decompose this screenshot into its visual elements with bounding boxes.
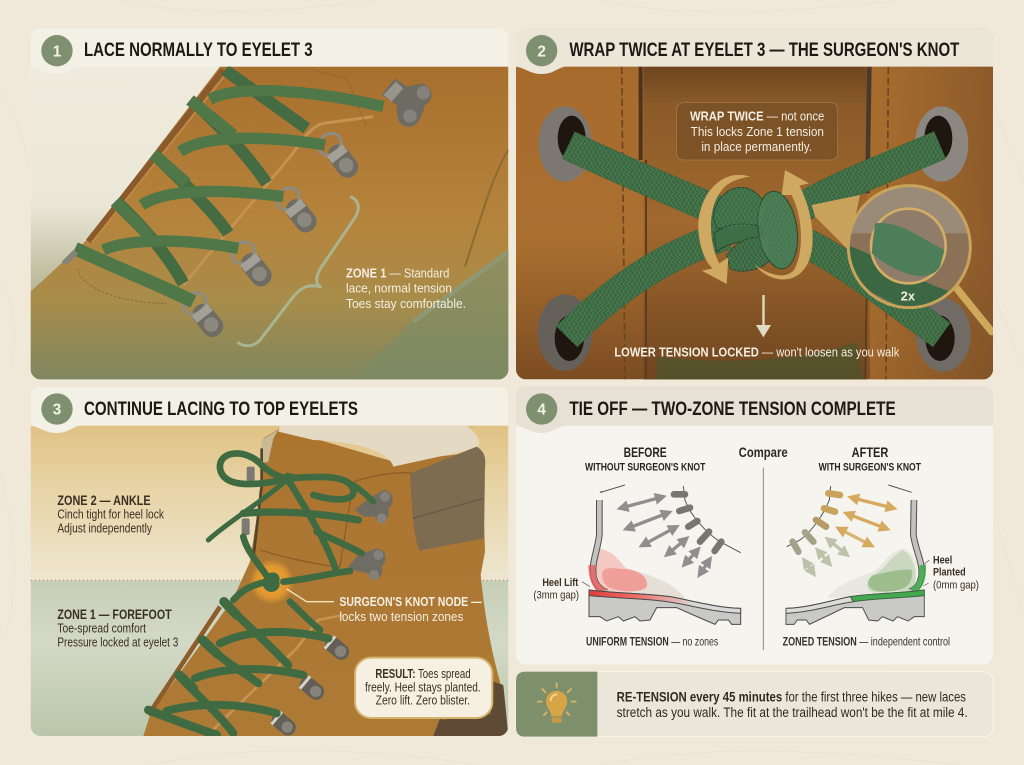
- boot leather: [31, 67, 508, 379]
- before heading: WITHOUT SURGEON'S KNOT: [585, 462, 706, 474]
- panel 1 header: [31, 28, 508, 74]
- fur collar: [278, 426, 479, 467]
- panel 3 header: 3: [53, 402, 61, 419]
- wrap twice callout: WRAP TWICE — not once: [690, 109, 824, 124]
- tip text: RE-TENSION every 45 minutes for the first three hikes — new laces: [617, 689, 966, 704]
- ankle zone background: [31, 387, 508, 581]
- hardware: [242, 467, 393, 739]
- zone 1 label: Pressure locked at eyelet 3: [57, 635, 178, 650]
- panel 1 background: [30, 209, 508, 380]
- laces: [148, 485, 373, 735]
- tip bar: [516, 672, 993, 737]
- before sole: [589, 590, 741, 624]
- leather details: [148, 448, 412, 736]
- surgeon's knot node label: SURGEON'S KNOT NODE —: [339, 594, 482, 609]
- before foot shape: [596, 548, 685, 598]
- after boot shell: [910, 500, 922, 592]
- tip text: stretch as you walk. The fit at the trailhead won't be the fit at mile 4.: [617, 705, 968, 720]
- before lace pegs: [674, 494, 721, 551]
- forefoot zone background: [31, 581, 508, 736]
- zone 1 note: [346, 265, 466, 311]
- panel 3 header: [31, 387, 508, 433]
- boot sole: [433, 682, 508, 736]
- surgeon's knot node label: locks two tension zones: [339, 609, 464, 624]
- compare label: Compare: [739, 444, 788, 460]
- surgeon's knot: [713, 187, 802, 271]
- heel lift label: Heel Lift: [542, 577, 579, 589]
- comparison divider: [762, 468, 765, 650]
- knot glow: [250, 560, 293, 603]
- eyelet hardware right: [179, 78, 432, 342]
- panel 3 header: CONTINUE LACING TO TOP EYELETS: [84, 398, 358, 420]
- surgeon's knot node label: [340, 597, 482, 621]
- wrap twice callout: in place permanently.: [701, 139, 812, 154]
- boot sole band: [353, 250, 508, 379]
- icon: light bulb: [538, 683, 576, 723]
- result callout: Zero lift. Zero blister.: [376, 692, 470, 707]
- result callout: RESULT: Toes spread: [375, 666, 471, 681]
- leather edge and stitching: [78, 70, 373, 303]
- zone 2 label: ZONE 2 — ANKLE: [57, 493, 151, 508]
- wrap twice callout: [677, 103, 838, 160]
- gold rotation arrows: [698, 170, 813, 284]
- after sole: [786, 590, 924, 624]
- lace flaps and stitching: [622, 67, 888, 379]
- after foot shape: [827, 548, 917, 598]
- zone 1 bracket: [237, 197, 358, 346]
- result callout: freely. Heel stays planted.: [365, 679, 481, 694]
- heel planted label: [923, 554, 979, 591]
- panel 2 header: [516, 28, 993, 74]
- panel 4 card: [516, 386, 993, 664]
- zone 2 label: Adjust independently: [57, 520, 152, 535]
- heel planted label: Planted: [933, 567, 966, 579]
- before heading: BEFORE: [624, 444, 667, 460]
- wrap twice callout: This locks Zone 1 tension: [691, 124, 824, 139]
- uniform tension caption: UNIFORM TENSION — no zones: [586, 636, 718, 649]
- zone 2 label: Cinch tight for heel lock: [57, 507, 164, 522]
- after tension arrows: [804, 497, 894, 574]
- before heading: [585, 444, 706, 474]
- lower tension note: LOWER TENSION LOCKED — won't loosen as you walk: [614, 345, 900, 360]
- bow: [208, 453, 353, 570]
- panel 1: lace normally to eyelet 3: [31, 28, 508, 379]
- heel lift label: (3mm gap): [533, 590, 579, 602]
- leather background: [516, 28, 993, 379]
- after boot diagram: [786, 485, 924, 624]
- after heading: WITH SURGEON'S KNOT: [819, 462, 921, 474]
- surgeon's knot node: [263, 572, 280, 592]
- zone 1 label: Toe-spread comfort: [57, 621, 146, 636]
- zone 1 note: ZONE 1 — Standard: [346, 265, 449, 280]
- small left eyelets: [62, 250, 78, 265]
- magnifier: 2x: [901, 289, 916, 304]
- panel 2: wrap twice surgeon's knot: [516, 28, 993, 380]
- panel 3: continue lacing to top eyelets: [31, 387, 508, 739]
- before boot diagram: [589, 485, 741, 624]
- callout leader: [287, 589, 334, 602]
- panel 1 header: 1: [53, 43, 62, 60]
- panel 4 header: 4: [537, 402, 546, 419]
- result callout: [355, 658, 492, 718]
- panel 1 header: LACE NORMALLY TO EYELET 3: [84, 39, 313, 61]
- tip text: [617, 689, 968, 720]
- zone 1 label: ZONE 1 — FOREFOOT: [57, 607, 172, 622]
- after lace pegs: [793, 493, 840, 552]
- zone 1 label: [57, 607, 178, 650]
- zone 1 note: lace, normal tension: [346, 281, 452, 296]
- zone 2 label: [57, 493, 164, 535]
- heel planted label: Heel: [933, 554, 952, 566]
- after heading: [819, 444, 921, 474]
- tip icon panel: [516, 672, 597, 737]
- before tension arrows: [620, 497, 710, 575]
- panel 2 header: 2: [537, 43, 546, 60]
- panel 4 header: TIE OFF — TWO-ZONE TENSION COMPLETE: [569, 398, 896, 420]
- crossing laces: [567, 145, 942, 337]
- tension down arrow: [756, 295, 771, 337]
- magnifier: [812, 186, 992, 332]
- boot body: [143, 428, 508, 736]
- padded collar: [410, 447, 485, 551]
- zone 1 note: Toes stay comfortable.: [346, 296, 466, 311]
- boot tongue: [643, 67, 867, 380]
- metal eyelets: [538, 106, 971, 372]
- after heading: AFTER: [852, 444, 888, 460]
- panel 4 header: [516, 386, 993, 433]
- over laces: [75, 91, 383, 302]
- heel lift label: [533, 577, 590, 602]
- under laces: [117, 70, 307, 283]
- before boot shell: [593, 500, 607, 592]
- panel 4: tie off comparison: [516, 386, 993, 737]
- zoned tension caption: ZONED TENSION — independent control: [783, 636, 950, 649]
- heel planted label: (0mm gap): [933, 579, 979, 591]
